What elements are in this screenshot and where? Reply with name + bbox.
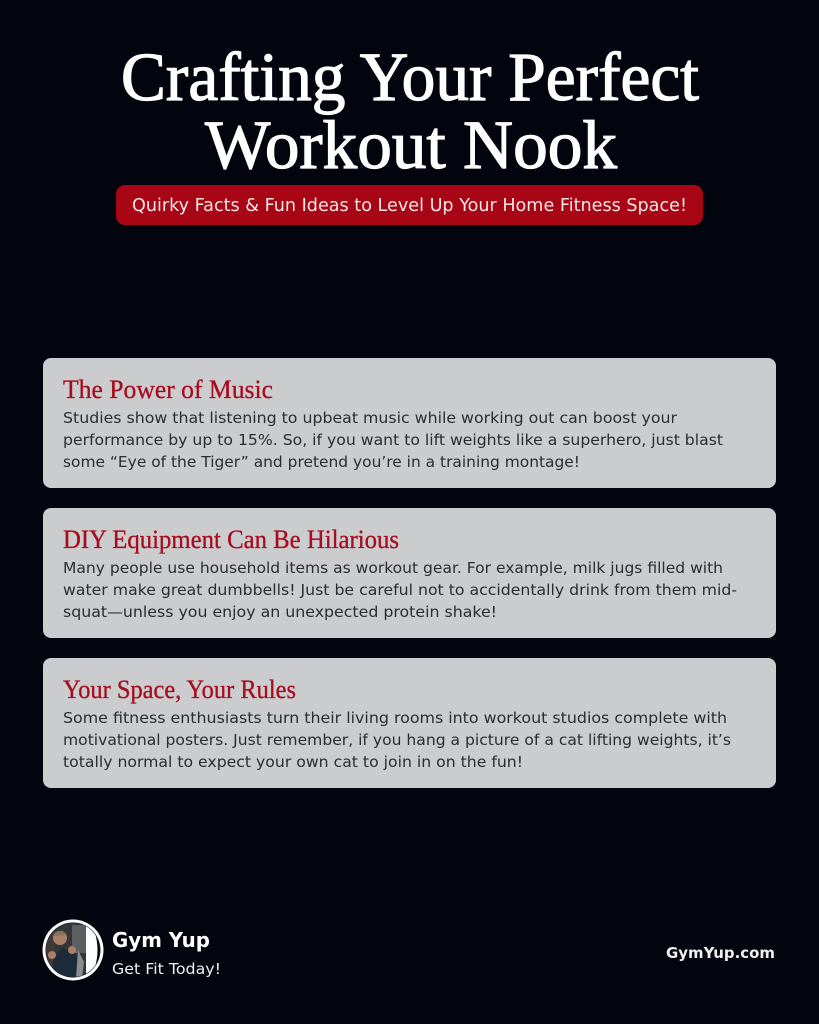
text: music body: [63, 409, 723, 471]
text: music body: Studies show that listening to upbeat music while working out can boost your: [63, 409, 678, 427]
heading: your space your rules: Your Space, Your Rules: [63, 675, 296, 704]
text: music body: some “Eye of the Tiger” and pretend you’re in a training montage!: [63, 453, 580, 471]
panel: the power of music: [43, 358, 776, 488]
panel: your space your rules: [43, 658, 776, 788]
text: space body: totally normal to expect your own cat to join in on the fun!: [63, 753, 523, 771]
text: diy body: Many people use household items as workout gear. For example, milk jugs filled with: [63, 559, 723, 577]
panel: diy equipment: [43, 508, 776, 638]
title: [121, 39, 699, 183]
icon: avatar: [42, 920, 104, 980]
text: space body: [63, 709, 731, 771]
brand name: Gym Yup: [112, 928, 210, 952]
text: diy body: [63, 559, 737, 621]
text: space body: motivational posters. Just remember, if you hang a picture of a cat lifting weights, it’s: [63, 731, 731, 749]
text: diy body: water make great dumbbells! Just be careful not to accidentally drink from them mid-: [63, 581, 737, 599]
title: Workout Nook: [205, 107, 618, 183]
text: music body: performance by up to 15%. So, if you want to lift weights like a superhero, just blast: [63, 431, 723, 449]
subtitle banner: [116, 185, 703, 225]
subtitle banner: Quirky Facts & Fun Ideas to Level Up Your Home Fitness Space!: [132, 196, 687, 216]
title: Crafting Your Perfect: [121, 39, 699, 115]
tagline: Get Fit Today!: [112, 960, 221, 978]
text: space body: Some fitness enthusiasts turn their living rooms into workout studios complete with: [63, 709, 727, 727]
text: diy body: squat—unless you enjoy an unexpected protein shake!: [63, 603, 497, 621]
heading: the power of music: The Power of Music: [63, 375, 273, 404]
website: GymYup.com: [666, 944, 775, 962]
heading: diy equipment: DIY Equipment Can Be Hilarious: [63, 525, 399, 554]
